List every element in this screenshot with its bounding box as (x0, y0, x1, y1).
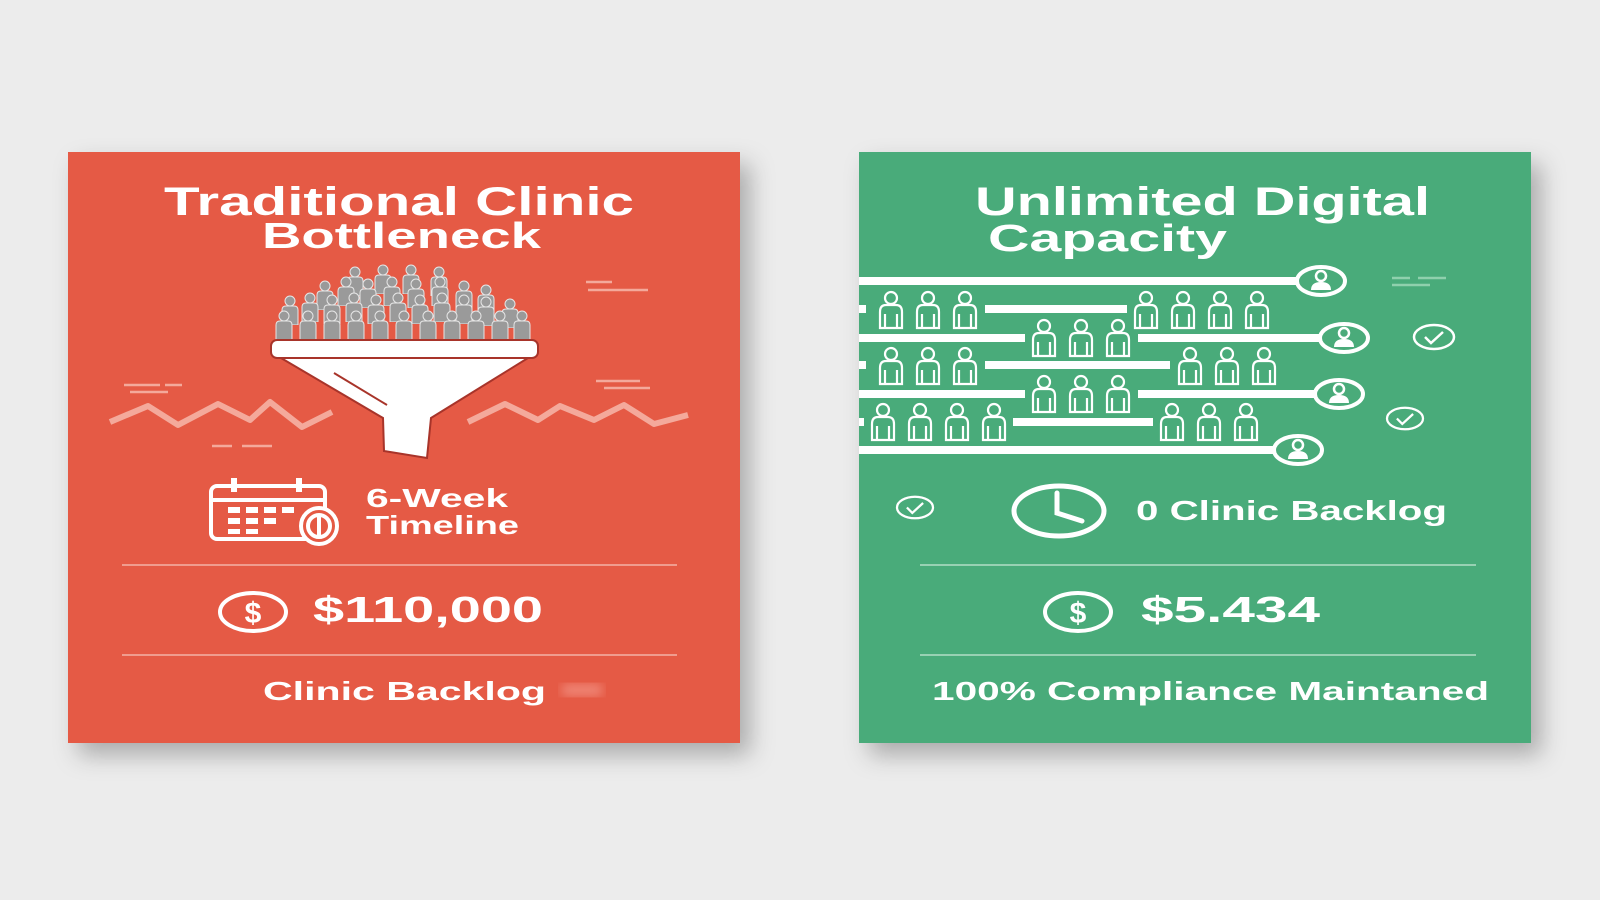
icon: checkmarks (897, 325, 1454, 518)
heading: unlimited digital capacity: Capacity (988, 218, 1227, 260)
chart: parallel patient lanes (859, 267, 1446, 464)
icon: dollar circle (220, 593, 286, 631)
icon: dollar circle: $ (245, 597, 262, 630)
text: 0 clinic backlog: 0 Clinic Backlog (1136, 495, 1447, 526)
text: 6-week timeline: 6-Week (366, 483, 509, 513)
heading: unlimited digital capacity (975, 180, 1430, 260)
decorative zigzag lines (110, 282, 688, 446)
icon: dollar circle (1045, 593, 1111, 631)
icon: crowd in funnel (271, 265, 538, 458)
heading: unlimited digital capacity: Unlimited Digital (975, 180, 1430, 224)
text: cost 110,000: $110,000 (313, 589, 543, 630)
heading: traditional clinic: Bottleneck (262, 215, 542, 256)
text: clinic backlog: Clinic Backlog (263, 676, 546, 706)
text: cost 5.434: $5.434 (1141, 589, 1320, 630)
panel: unlimited digital capacity (859, 152, 1531, 743)
icon: dollar circle: $ (1070, 597, 1087, 630)
text: clinic backlog (263, 676, 602, 706)
icon: clock (1014, 486, 1104, 536)
panel: traditional clinic bottleneck (68, 152, 740, 743)
heading: traditional clinic (164, 180, 634, 256)
text: 6-week timeline (366, 483, 519, 540)
text: compliance: 100% Compliance Maintaned (932, 676, 1489, 706)
icon: calendar (211, 478, 337, 544)
text: 6-week timeline: Timeline (366, 510, 519, 540)
heading: traditional clinic: Traditional Clinic (164, 180, 634, 224)
